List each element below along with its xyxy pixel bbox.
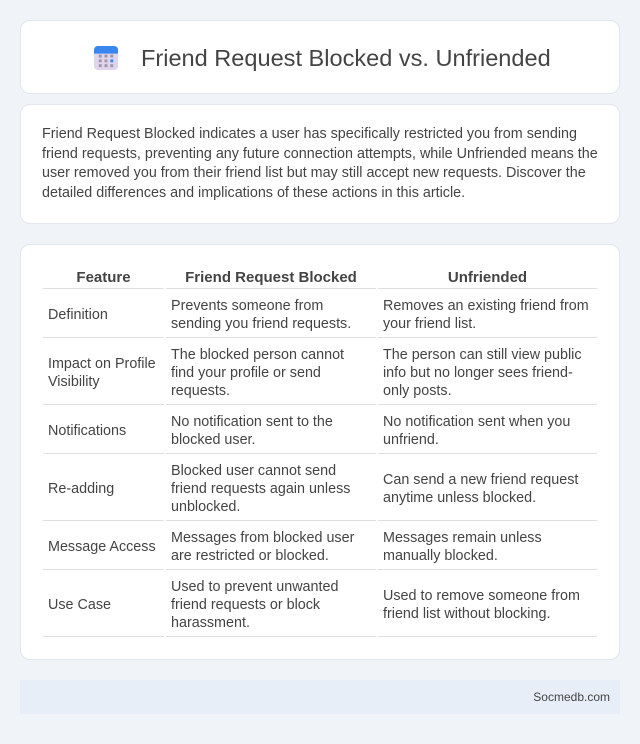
intro text: detailed differences and implications of these actions in this article.	[42, 184, 465, 200]
footer text: Socmedb.com	[533, 690, 610, 704]
comparison table: Used to prevent unwanted	[171, 579, 338, 595]
intro text: Friend Request Blocked indicates a user has specifically restricted you from sending	[42, 126, 577, 142]
comparison table: No notification sent to the	[171, 414, 333, 430]
comparison table: your friend list.	[383, 316, 476, 332]
comparison table: harassment.	[171, 615, 250, 631]
row: Message Access: Message Access	[48, 539, 156, 555]
comparison table: unblocked.	[171, 499, 240, 515]
table card	[20, 244, 620, 660]
intro text	[42, 126, 598, 200]
header: Unfriended: Unfriended	[448, 269, 527, 286]
row: Use Case: Use Case	[48, 597, 111, 613]
comparison table: unfriend.	[383, 432, 439, 448]
comparison table: are restricted or blocked.	[171, 548, 329, 564]
icon: calendar	[94, 46, 118, 70]
comparison table: friend requests again unless	[171, 481, 350, 497]
comparison table: sending you friend requests.	[171, 316, 351, 332]
comparison table: Used to remove someone from	[383, 588, 580, 604]
header: Feature: Feature	[76, 269, 131, 286]
comparison table: find your profile or send	[171, 365, 321, 381]
comparison table: Removes an existing friend from	[383, 298, 589, 314]
comparison table: blocked user.	[171, 432, 256, 448]
comparison table: Prevents someone from	[171, 298, 323, 314]
row: Notifications: Notifications	[48, 423, 126, 439]
comparison table: The blocked person cannot	[171, 347, 344, 363]
row: Impact: Impact on Profile	[48, 356, 156, 372]
comparison table: only posts.	[383, 383, 452, 399]
row: Re-adding: Re-adding	[48, 481, 114, 497]
comparison table: requests.	[171, 383, 230, 399]
intro card	[20, 104, 620, 224]
comparison table: No notification sent when you	[383, 414, 570, 430]
title: Friend Request Blocked vs. Unfriended	[141, 45, 551, 71]
comparison table: friend requests or block	[171, 597, 320, 613]
comparison table: info but no longer sees friend-	[383, 365, 573, 381]
comparison table: friend list without blocking.	[383, 606, 550, 622]
intro text: friend requests, preventing any future connection attempts, while Unfriended means the	[42, 146, 598, 162]
comparison table: Visibility	[48, 374, 100, 390]
comparison table: manually blocked.	[383, 548, 498, 564]
comparison table: Messages from blocked user	[171, 530, 354, 546]
comparison table: anytime unless blocked.	[383, 490, 536, 506]
header: Friend Request Blocked: Friend Request Blocked	[185, 269, 357, 286]
comparison table: Blocked user cannot send	[171, 463, 336, 479]
row: Definition: Definition	[48, 307, 108, 323]
comparison table: Can send a new friend request	[383, 472, 578, 488]
comparison table: Messages remain unless	[383, 530, 542, 546]
comparison table: The person can still view public	[383, 347, 582, 363]
footer bar	[20, 680, 620, 714]
header card	[20, 20, 620, 94]
intro text: user removed you from their friend list but may still accept new requests. Discover the	[42, 165, 586, 181]
